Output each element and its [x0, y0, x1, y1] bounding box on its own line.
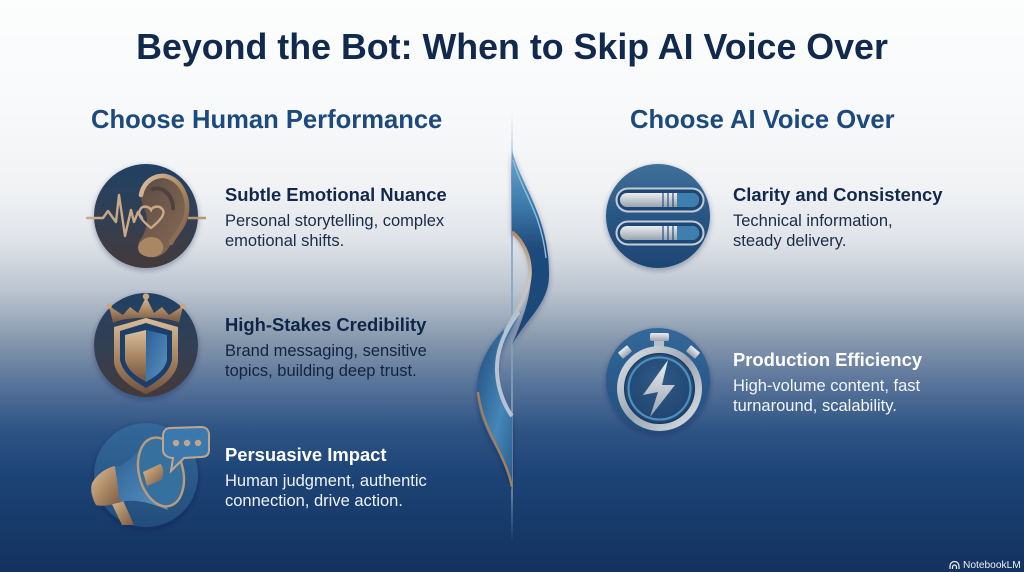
text block: Subtle Emotional Nuance: emotional shifts.: [225, 232, 344, 250]
text block: Production Efficiency: turnaround, scalability.: [733, 397, 897, 415]
text block: Production Efficiency: [733, 349, 922, 415]
text block: High-Stakes Credibility: High-Stakes Credibility: [225, 314, 426, 335]
title: Beyond the Bot: When to Skip AI Voice Over: [136, 27, 888, 67]
text block: Clarity and Consistency: Clarity and Consistency: [733, 184, 943, 205]
text block: Production Efficiency: Production Efficiency: [733, 349, 922, 370]
heading: human column: Choose Human Performance: [91, 106, 442, 134]
text block: Subtle Emotional Nuance: Personal storytelling, complex: [225, 212, 444, 230]
text block: Production Efficiency: High-volume content, fast: [733, 377, 920, 395]
heading: AI column: Choose AI Voice Over: [630, 106, 895, 134]
icon: megaphone with speech bubble: [91, 423, 209, 527]
text block: Persuasive Impact: connection, drive action.: [225, 492, 403, 510]
text block: Persuasive Impact: Persuasive Impact: [225, 444, 387, 465]
icon: crowned shield: [94, 293, 198, 397]
text block: Clarity and Consistency: Technical information,: [733, 212, 893, 230]
icon: ear and heartbeat: [87, 164, 206, 268]
text block: Subtle Emotional Nuance: Subtle Emotional Nuance: [225, 184, 447, 205]
text block: Subtle Emotional Nuance: [225, 184, 447, 250]
text block: Persuasive Impact: [225, 444, 427, 510]
watermark: NotebookLM: [963, 560, 1021, 571]
text block: High-Stakes Credibility: Brand messaging, sensitive: [225, 342, 427, 360]
text block: High-Stakes Credibility: [225, 314, 427, 380]
text block: Clarity and Consistency: steady delivery.: [733, 232, 846, 250]
text block: Persuasive Impact: Human judgment, authentic: [225, 472, 427, 490]
icon: stopwatch with lightning bolt: [606, 328, 710, 432]
text block: Clarity and Consistency: [733, 184, 943, 250]
icon: two sliders: [606, 164, 710, 268]
text block: High-Stakes Credibility: topics, building deep trust.: [225, 362, 417, 380]
icon: NotebookLM logo: [950, 562, 959, 569]
